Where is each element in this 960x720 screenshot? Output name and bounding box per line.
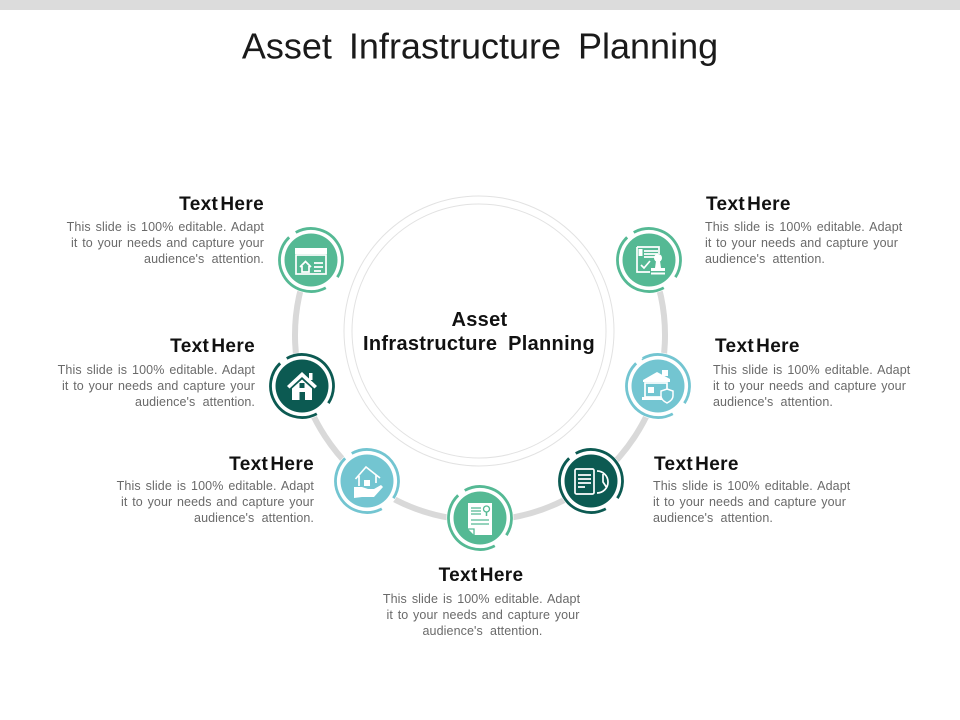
node 4: certificate document icon: [437, 475, 523, 561]
text block 2: This slide is 100% editable. Adapt: [58, 363, 255, 377]
text block 4: This slide is 100% editable. Adapt: [383, 592, 581, 606]
text block 4: audience's attention.: [423, 624, 542, 638]
text block 3: [117, 454, 314, 525]
node 5: document and clock icon: [548, 438, 634, 524]
text block 3: Text Here: [229, 454, 314, 475]
text block 1: it to your needs and capture your: [71, 236, 264, 250]
text block 6: Text Here: [715, 336, 800, 357]
text block 7: Text Here: [706, 194, 791, 215]
center label: Infrastructure Planning: [363, 333, 595, 355]
text block 3: it to your needs and capture your: [121, 495, 314, 509]
text block 7: This slide is 100% editable. Adapt: [705, 220, 903, 234]
text block 7: [705, 194, 903, 266]
text block 4: Text Here: [439, 565, 523, 586]
text block 6: [713, 336, 911, 409]
text block 6: it to your needs and capture your: [713, 379, 906, 393]
node 7: certificate and stamp icon: [606, 217, 692, 303]
text block 1: audience's attention.: [144, 252, 264, 266]
text block 1: This slide is 100% editable. Adapt: [67, 220, 264, 234]
text block 6: audience's attention.: [713, 395, 833, 409]
text block 2: [58, 336, 255, 409]
arc connector: [295, 260, 665, 520]
text block 5: it to your needs and capture your: [653, 495, 846, 509]
text block 3: This slide is 100% editable. Adapt: [117, 479, 314, 493]
text block 1: Text Here: [179, 194, 264, 215]
text block 2: audience's attention.: [135, 395, 255, 409]
text block 4: it to your needs and capture your: [387, 608, 579, 622]
node 6: house with shield icon: [615, 343, 701, 429]
node 1: calendar house icon: [268, 217, 354, 303]
text block 6: This slide is 100% editable. Adapt: [713, 363, 911, 377]
text block 5: [653, 454, 851, 525]
node 2: house icon: [259, 343, 345, 429]
center label: Asset: [452, 309, 508, 331]
center circle: [344, 196, 614, 466]
text block 7: it to your needs and capture your: [705, 236, 898, 250]
text block 5: Text Here: [654, 454, 739, 475]
text block 5: This slide is 100% editable. Adapt: [653, 479, 851, 493]
text block 7: audience's attention.: [705, 252, 825, 266]
text block 5: audience's attention.: [653, 511, 773, 525]
text block 1: [67, 194, 264, 266]
text block 2: Text Here: [170, 336, 255, 357]
text block 4: [383, 565, 581, 638]
text block 3: audience's attention.: [194, 511, 314, 525]
text block 2: it to your needs and capture your: [62, 379, 255, 393]
title: Asset Infrastructure Planning: [242, 26, 718, 66]
node 3: house in hand icon: [324, 438, 410, 524]
